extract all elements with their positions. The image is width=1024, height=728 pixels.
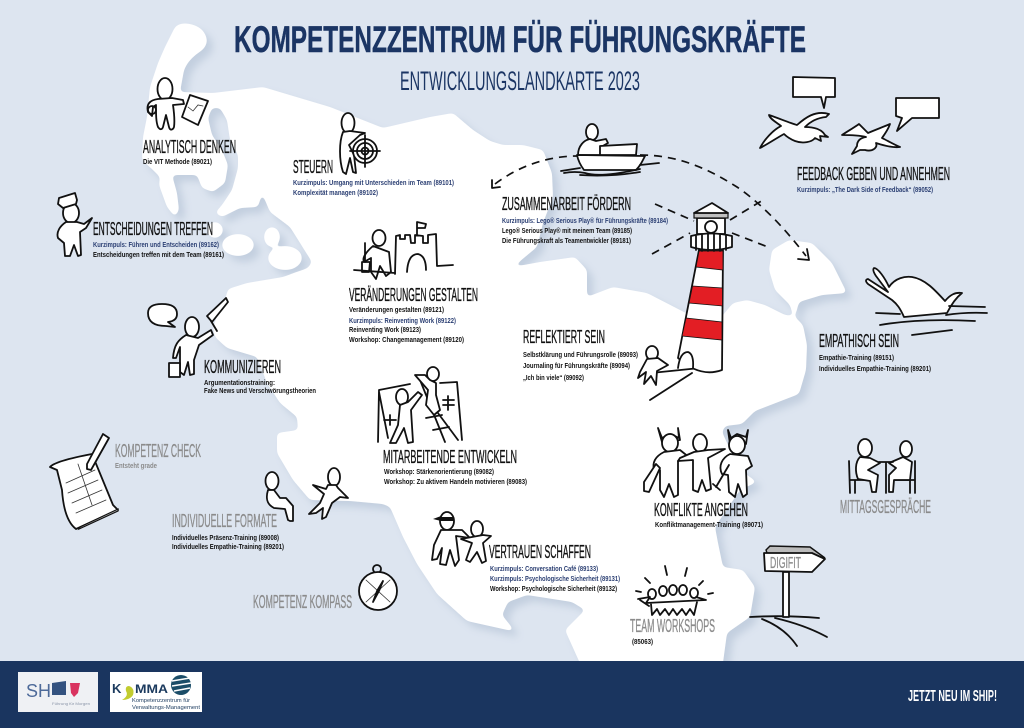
logo: SH bbox=[18, 672, 98, 712]
panel: kommunizieren bbox=[148, 298, 316, 395]
panel: empathisch sein: EMPATHISCH SEIN bbox=[819, 331, 899, 351]
icon: signpost on hill bbox=[750, 546, 827, 646]
course list: Individuelles Empathie-Training (89201) bbox=[819, 366, 931, 373]
lighthouse beams bbox=[652, 200, 768, 254]
course list: Individuelles Präsenz-Training (89008) bbox=[172, 535, 279, 542]
panel: steuern: STEUERN bbox=[293, 157, 333, 177]
course list: Kurzimpuls: Conversation Café (89133) bbox=[490, 566, 598, 573]
panel: kompetenz kompass: KOMPETENZ KOMPASS bbox=[253, 592, 352, 612]
icon: person with chart bbox=[147, 78, 208, 130]
logo: SH: Führung für Morgen bbox=[52, 701, 90, 706]
course list: Reinventing Work (89123) bbox=[349, 327, 421, 334]
text: TEAM WORKSHOPS bbox=[630, 616, 715, 636]
heading: KOMMUNIZIEREN bbox=[204, 357, 281, 377]
text: KOMPETENZ CHECK bbox=[115, 441, 201, 461]
logo: KOMMA: K bbox=[112, 681, 122, 696]
icon: person by lighthouse bbox=[638, 346, 668, 385]
panel: konflikte angehen bbox=[644, 428, 763, 529]
panel: individuelle formate bbox=[172, 468, 348, 551]
icon: captain figure bbox=[57, 193, 92, 256]
course list: Fake News und Verschwörungstheorien bbox=[204, 388, 316, 395]
icon: checklist paper and pencil bbox=[50, 434, 118, 529]
panel: vertrauen schaffen: VERTRAUEN SCHAFFEN bbox=[489, 542, 591, 562]
panel: vertrauen schaffen bbox=[432, 512, 620, 593]
icon: person at helm bbox=[340, 113, 380, 174]
panel: reflektiert sein bbox=[523, 203, 732, 400]
icon: person in boat with waves bbox=[561, 124, 659, 176]
icon: people climbing a wall with ladder bbox=[378, 367, 462, 443]
logo: KOMMA: Kompetenzzentrum für bbox=[132, 698, 190, 704]
course list bbox=[523, 352, 638, 382]
course list: Kurzimpuls: „The Dark Side of Feedback“ (89052) bbox=[797, 187, 933, 194]
course number: (85063) bbox=[632, 639, 653, 646]
icon: two vikings and mediator bbox=[644, 428, 752, 497]
panel: reflektiert sein: REFLEKTIERT SEIN bbox=[523, 327, 605, 347]
course list: Journaling für Führungskräfte (89094) bbox=[523, 363, 630, 370]
icon: person with sand castle bbox=[354, 222, 453, 279]
icon: dolphin with waves bbox=[866, 268, 987, 335]
course list: Kurzimpuls: Führen und Entscheiden (89162) bbox=[93, 242, 219, 249]
panel: analytisch denken bbox=[143, 78, 236, 166]
panel: mittagsgespräche bbox=[840, 439, 931, 517]
course list: Empathie-Training (89151) bbox=[819, 355, 894, 362]
text: VERÄNDERUNGEN GESTALTEN bbox=[349, 285, 478, 305]
course list bbox=[490, 566, 620, 593]
heading: MITARBEITENDE ENTWICKELN bbox=[383, 447, 517, 467]
panel: kompetenz check bbox=[50, 434, 201, 529]
map: white landmass bbox=[142, 23, 847, 670]
panel: zusammenarbeit fördern: ZUSAMMENARBEIT FÖRDERN bbox=[502, 194, 631, 214]
icon: two people at lunch table bbox=[849, 439, 915, 493]
course list: Die Führungskraft als Teamentwickler (89181) bbox=[502, 238, 631, 245]
text: ANALYTISCH DENKEN bbox=[143, 137, 236, 157]
course list bbox=[384, 469, 527, 486]
course list bbox=[204, 380, 316, 395]
icon: two seated figures bbox=[266, 468, 348, 521]
icon: blindfolded person led by partner bbox=[432, 512, 491, 566]
panel: digifit signpost bbox=[750, 546, 827, 646]
course list: Lego® Serious Play® mit meinem Team (89185) bbox=[502, 227, 632, 235]
course list: Konfliktmanagement-Training (89071) bbox=[655, 522, 763, 529]
icon: team around table with rays bbox=[636, 566, 713, 615]
course list bbox=[349, 307, 464, 344]
panel: veränderungen gestalten bbox=[349, 222, 478, 344]
course list: Entscheidungen treffen mit dem Team (89161) bbox=[93, 252, 224, 259]
course list bbox=[502, 217, 668, 245]
label: DIGIFIT bbox=[770, 555, 801, 572]
panel: zusammenarbeit fördern bbox=[502, 124, 668, 245]
panel: team workshops bbox=[630, 566, 715, 646]
course list: Kurzimpuls: Psychologische Sicherheit (89131) bbox=[490, 576, 620, 583]
logo: KOMMA bbox=[110, 672, 202, 712]
panel: steuern bbox=[293, 113, 454, 197]
logo: SH: SH bbox=[26, 681, 51, 701]
panel: empathisch sein bbox=[819, 268, 987, 373]
logo: KOMMA: MMA bbox=[135, 682, 168, 696]
subtitle: ENTWICKLUNGSLANDKARTE 2023 bbox=[400, 66, 640, 96]
course list: Kurzimpuls: Reinventing Work (89122) bbox=[349, 318, 456, 325]
course list bbox=[172, 535, 284, 551]
course list bbox=[293, 180, 454, 197]
course list: Veränderungen gestalten (89121) bbox=[349, 307, 444, 314]
course list: Die VIT Methode (89021) bbox=[143, 159, 212, 166]
panel: mitarbeitende entwickeln bbox=[378, 367, 527, 486]
panel: kompetenz kompass bbox=[253, 565, 397, 612]
course list: Argumentationstraining: bbox=[204, 380, 275, 387]
footer bar bbox=[0, 661, 1024, 728]
course list: Kurzimpuls: Umgang mit Unterschieden im Team (89101) bbox=[293, 180, 454, 187]
course list: Workshop: Psychologische Sicherheit (89132) bbox=[490, 586, 617, 593]
course list bbox=[819, 355, 931, 373]
course list: Komplexität managen (89102) bbox=[293, 190, 378, 197]
course list: Workshop: Zu aktivem Handeln motivieren (89083) bbox=[384, 479, 527, 486]
course list: Individuelles Empathie-Training (89201) bbox=[172, 544, 284, 551]
icon: lighthouse bbox=[650, 203, 732, 400]
icon: compass bbox=[359, 565, 397, 610]
course list: Kurzimpuls: Lego® Serious Play® für Führungskräfte (89184) bbox=[502, 217, 668, 225]
panel: feedback geben und annehmen bbox=[760, 77, 950, 194]
course list bbox=[93, 242, 224, 259]
course list: Workshop: Changemanagement (89120) bbox=[349, 337, 464, 344]
course list: „Ich bin viele“ (89092) bbox=[523, 375, 584, 382]
course list: Selbstklärung und Führungsrolle (89093) bbox=[523, 352, 638, 359]
icon: seagulls with speech bubbles bbox=[760, 77, 939, 154]
panel: entscheidungen treffen: ENTSCHEIDUNGEN TREFFEN bbox=[93, 219, 213, 239]
panel: konflikte angehen: KONFLIKTE ANGEHEN bbox=[654, 500, 748, 520]
panel: individuelle formate: INDIVIDUELLE FORMATE bbox=[172, 511, 277, 531]
logo: KOMMA: Verwaltungs-Management bbox=[132, 705, 200, 711]
panel: entscheidungen treffen bbox=[57, 193, 224, 259]
icon: person with flag and speech bubble bbox=[148, 298, 228, 377]
course list: Workshop: Stärkenorientierung (89082) bbox=[384, 469, 494, 476]
dashed route arc with arrow bbox=[492, 155, 809, 260]
note: Entsteht grade bbox=[115, 463, 157, 470]
